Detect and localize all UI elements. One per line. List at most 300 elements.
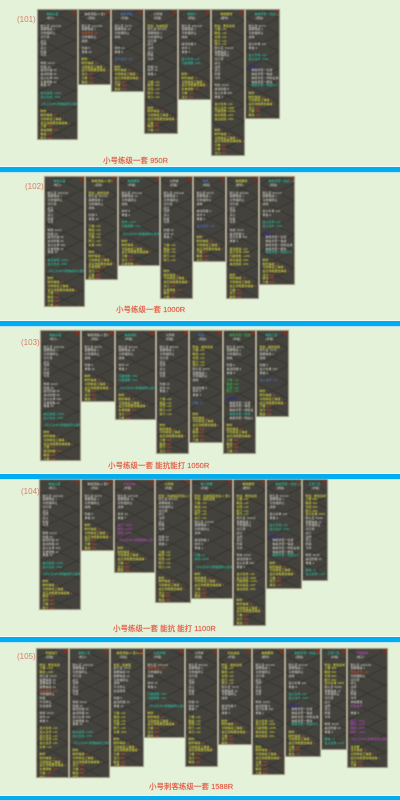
- panel: amulet: 力量 500: [324, 666, 336, 670]
- divider bar: [0, 166, 400, 173]
- panel: boots: 法力 200: [288, 748, 300, 752]
- panel: bracelet: 体力 +10: [222, 681, 233, 685]
- panel: gloves: 力量 200: [158, 594, 170, 598]
- panel: necklace: 最高洗练属性等级 9: [88, 262, 115, 266]
- panel: gloves: 力量 +10: [164, 243, 175, 247]
- panel: ring: 最高洗练属性等级等 9: [118, 557, 147, 561]
- panel: helmet: 精炼头盔: [54, 179, 66, 183]
- panel: ring: [111, 9, 144, 92]
- panel: armor: 重量 3: [236, 565, 245, 569]
- panel: amulet: (手镯): [312, 486, 320, 490]
- panel: mantle: 最高洗练属性等级等 9: [350, 756, 380, 760]
- panel: amulet: 敏捷 500: [324, 670, 336, 674]
- panel: armor: 物攻 10/10: [236, 553, 251, 557]
- panel: gloves: 大师戒: [170, 179, 179, 183]
- panel: armor: 敏捷 +10: [214, 31, 226, 35]
- label: 104: (104): [21, 487, 40, 496]
- panel: weapon: 负重 +10: [40, 745, 51, 749]
- panel: helmet: 耐久度 100/100: [44, 345, 64, 349]
- panel: armor: 闪避倍数 +10%: [230, 254, 250, 258]
- panel: armor: 可修理转让: [214, 53, 230, 57]
- panel: ring: 可修理转让: [114, 31, 130, 35]
- panel: gloves: (武器): [164, 486, 172, 490]
- panel: bracelet: [189, 330, 223, 443]
- panel: ring: 可转移给工等级 1: [118, 553, 141, 557]
- panel: amulet: 战士: [324, 700, 331, 704]
- panel: gloves: 法师: [164, 209, 170, 213]
- panel: bracelet: 闪避 +5: [192, 401, 203, 405]
- panel: armor: 精炼手套一套装: [230, 333, 251, 337]
- panel: armor: 法师: [214, 65, 221, 69]
- panel: helmet: 耐久度 100/100: [72, 663, 93, 667]
- panel: gloves: 刺客: [188, 689, 195, 693]
- panel: ring: 制作: [122, 239, 128, 243]
- panel: armor: 魔法抵抗 +10: [230, 247, 247, 251]
- panel: gloves: (武器): [166, 337, 174, 341]
- panel: gloves: 法师: [188, 681, 195, 685]
- panel: armor: 制作: [214, 128, 221, 132]
- panel: bracelet: 重量 3: [194, 546, 203, 550]
- panel: gloves: 体力 +10: [160, 412, 171, 416]
- panel: gloves: (武器): [154, 16, 162, 20]
- panel: bracelet: 耐久度 70/70: [222, 685, 239, 689]
- panel: gloves: 力量 +10: [188, 715, 200, 719]
- panel: boots: 敏捷 200: [248, 113, 260, 117]
- panel: ring: 通用: [148, 674, 154, 678]
- panel: helmet: 敏捷 200: [72, 771, 84, 775]
- panel: bracelet: (可以与NPC修理或转让使用): [195, 565, 233, 569]
- panel: armor: 最高洗练属性等级 9: [256, 756, 282, 760]
- panel: armor: (腰带): [242, 486, 250, 490]
- panel: boots: 可修理转让: [262, 198, 278, 202]
- panel: helmet: 可打捞: [48, 202, 57, 206]
- panel: armor: 附加 : 属性加成: [236, 494, 257, 498]
- panel: gloves: 体力 +10: [164, 258, 175, 262]
- panel: bracelet: 重量 3: [182, 50, 190, 54]
- panel: boots: 套装(5/5): [270, 535, 282, 539]
- panel: armor: 法力 200: [230, 291, 241, 295]
- panel: boots: [266, 479, 302, 589]
- section 105: [17, 648, 388, 791]
- panel: bracelet: 力量 200: [192, 438, 204, 442]
- panel: bracelet: 魔法防御 5: [182, 42, 196, 46]
- panel: boots: 魔法 200: [288, 752, 300, 756]
- panel: ring: 可转移给工等级 1: [148, 719, 171, 723]
- panel: helmet: 制作等级 10: [44, 434, 60, 438]
- panel: necklace: 力量 +10: [114, 722, 125, 726]
- panel: bracelet: 制作: [196, 235, 203, 239]
- panel: helmet: 最高洗练属性等级等 9: [72, 760, 102, 764]
- panel: boots: (项链): [295, 655, 303, 659]
- panel: boots: 精炼手套一到战士刃: [272, 553, 300, 557]
- panel: armor: 最大法术 +500: [256, 722, 275, 726]
- panel: helmet: 魔法防御 200: [44, 449, 61, 453]
- panel: helmet: [37, 9, 78, 140]
- panel: necklace: 防御 5: [114, 696, 122, 700]
- panel: gloves: 命中 10: [160, 386, 170, 390]
- panel: gloves: 防御 10: [160, 382, 170, 386]
- panel: armor: 最大负重 500: [230, 235, 247, 239]
- panel: helmet: 制作: [42, 579, 49, 583]
- panel: bracelet: (手镯): [200, 486, 208, 490]
- panel: weapon: 可修理转让: [40, 692, 55, 696]
- panel: boots: 通用: [262, 202, 269, 206]
- panel: bracelet: 法力 200: [196, 258, 208, 262]
- panel: weapon: 刺客短刃: [46, 651, 58, 655]
- panel: necklace: 可修理转让: [82, 35, 97, 39]
- panel: helmet: 制作等级 10: [72, 752, 89, 756]
- panel: bracelet: 魔法防御 3: [196, 209, 211, 213]
- panel: boots: 通用: [270, 505, 276, 509]
- panel: ring: 闪避倍数 +5%: [118, 378, 137, 382]
- panel: mantle: 耐久度 100/100: [350, 663, 371, 667]
- panel: ring: 负重倍数 200: [118, 408, 136, 412]
- panel: bracelet: 体力 +10: [194, 516, 206, 520]
- panel: armor: (手镯): [232, 337, 240, 341]
- panel: necklace: 力量 200: [84, 542, 96, 546]
- panel: helmet: 物攻 10/10: [42, 531, 57, 535]
- panel: bracelet: 通用: [182, 35, 188, 39]
- panel: armor: 可转移给工等级 1: [226, 430, 250, 434]
- panel: ring: 能打 +10%: [118, 523, 132, 527]
- panel: amulet: 耐久度 85/85: [324, 685, 342, 689]
- panel: weapon: 耐久度 10/10: [40, 674, 57, 678]
- section 104: [21, 478, 328, 633]
- panel: bracelet: (项链): [198, 337, 206, 341]
- panel: gloves: 刺客: [158, 523, 165, 527]
- panel: weapon: 需要等级 10: [40, 678, 56, 682]
- panel: helmet: 耐久度 100/100: [40, 24, 61, 28]
- panel: necklace: 通用: [88, 206, 95, 210]
- panel: weapon: 敏捷 +100: [40, 670, 53, 674]
- panel: boots: 精炼手套一属性: [272, 550, 294, 554]
- panel: boots: 精炼手套一属性: [266, 247, 287, 251]
- panel: gloves: [185, 648, 218, 767]
- panel: ring: 可修理转让: [148, 670, 163, 674]
- panel: boots: 套装(5/5): [248, 65, 261, 69]
- panel: necklace: 刷新属性 10: [82, 31, 98, 35]
- panel: mantle: 能打 +10%: [350, 719, 365, 723]
- panel: armor: 最高洗练属性等级 9: [230, 284, 256, 288]
- panel: armor: 可转移给工等级 1: [230, 280, 253, 284]
- panel: gloves: 智慧 +10: [188, 722, 200, 726]
- panel: helmet: 道士: [48, 213, 54, 217]
- panel: armor: (腰带): [236, 183, 244, 187]
- panel: armor: 法师: [236, 535, 243, 539]
- panel: amulet: 法师: [306, 535, 312, 539]
- panel: helmet: 需要等级 1: [72, 666, 87, 670]
- panel: helmet: 魔法防御 20: [42, 538, 59, 542]
- panel: boots: 法力 200: [248, 106, 260, 110]
- panel: necklace: 耐久度 60/70: [84, 345, 102, 349]
- panel: necklace: 重量 20: [82, 50, 92, 54]
- panel: boots: 可修理转让: [288, 670, 304, 674]
- panel: boots: 最大法术 +500: [270, 527, 289, 531]
- panel: ring: 制作: [118, 393, 125, 397]
- panel: weapon: 负担倍率: [40, 704, 52, 708]
- panel: helmet: 可修理转让: [40, 31, 56, 35]
- panel: ring: 制作等级 10: [114, 68, 131, 72]
- panel: boots: 力量 200: [288, 745, 300, 749]
- panel: armor: 弓手: [214, 76, 221, 80]
- panel: necklace: 需要等级 10: [114, 674, 130, 678]
- panel: bracelet: (项链): [188, 16, 196, 20]
- panel: ring: 闪避倍数 +5%: [148, 696, 166, 700]
- panel: mantle: 需要等级 1: [350, 666, 365, 670]
- panel: boots: 最大法术 +10: [260, 378, 277, 382]
- panel: armor: 最大负重 500: [256, 707, 273, 711]
- panel: weapon: 刷新属性 +10: [40, 689, 57, 693]
- panel: necklace: 附加 : 抗魔强: [114, 663, 131, 667]
- panel: necklace: 制作: [88, 250, 95, 254]
- panel: boots: 精炼手套一到战士刃: [292, 722, 319, 726]
- panel: mantle: (帽子): [356, 655, 364, 659]
- panel: boots: (手镯): [266, 337, 274, 341]
- panel: necklace: 负重 +5%: [114, 730, 126, 734]
- panel: armor: 制作等级 10: [214, 132, 231, 136]
- panel: amulet: 重量 3: [306, 561, 314, 565]
- panel: armor: 需要等级 1: [230, 194, 244, 198]
- panel: weapon: 物攻 10/10: [40, 711, 54, 715]
- panel: bracelet: 精炼M: [188, 12, 196, 16]
- panel: helmet: 重量 20: [72, 722, 83, 726]
- panel: necklace: 力量 +10: [88, 224, 100, 228]
- panel: amulet: 重量 3: [324, 730, 333, 734]
- panel: boots: 精炼手套一转职业用: [292, 715, 319, 719]
- panel: bracelet: 通用: [196, 202, 203, 206]
- panel: necklace: 制作: [84, 374, 91, 378]
- panel: boots: 精炼手套一等级: [252, 72, 273, 76]
- panel: bracelet: 可修理转让: [182, 31, 197, 35]
- panel: gloves: [160, 176, 193, 299]
- panel: gloves: 可修理转让: [158, 505, 174, 509]
- panel: necklace: 耐力 +10: [114, 726, 125, 730]
- panel: helmet: 最大负重 200: [48, 243, 65, 247]
- panel: amulet: 敏捷 500: [306, 501, 317, 505]
- panel: bracelet: 法力 200: [194, 591, 206, 595]
- panel: gloves: 命中 10: [188, 704, 199, 708]
- panel: helmet: 敏捷 200: [48, 295, 59, 299]
- section 103: [21, 330, 290, 470]
- panel: armor: 可修理转让: [230, 198, 245, 202]
- panel: boots: 重量 8: [288, 685, 297, 689]
- panel: amulet: 附加 : 属性加成: [324, 663, 345, 667]
- panel: boots: 最大生命 +10: [248, 53, 266, 57]
- panel: armor: 道士: [230, 213, 236, 217]
- panel: ring: 重量 6: [122, 213, 130, 217]
- panel: helmet: 移速倍数 200: [40, 128, 58, 132]
- panel: bracelet: 附加 : 抗魔强度增加+1 套3: [194, 494, 230, 498]
- panel: necklace: 敏捷 200: [84, 546, 96, 550]
- panel: helmet: 防御 20: [44, 386, 54, 390]
- panel: boots: 精炼手套一到战士刃: [276, 482, 302, 486]
- panel: gloves: 制作等级 10: [148, 109, 164, 113]
- panel: ring: 最大法术 +10: [114, 57, 132, 61]
- panel: weapon: 最大生命 +10: [40, 726, 57, 730]
- panel: necklace: 制作等级 10: [84, 527, 101, 531]
- panel: boots: 制作等级 10: [288, 734, 305, 738]
- panel: gloves: 道士: [158, 520, 165, 524]
- panel: helmet: 移动速度 +10%: [40, 91, 61, 95]
- panel: helmet: 最大生命 +500: [40, 95, 60, 99]
- panel: helmet: 防御 20: [48, 232, 58, 236]
- divider bar: [0, 320, 400, 327]
- panel: gloves: 可转移给工等级 1: [164, 276, 187, 280]
- panel: armor: 敏捷 200: [236, 621, 248, 625]
- panel: bracelet: 耐力 +10: [192, 360, 204, 364]
- panel: gloves: 可修理转让: [164, 198, 179, 202]
- panel: gloves: 大师戒: [154, 12, 163, 16]
- panel: bracelet: 闪避 +5: [194, 553, 205, 557]
- panel: boots: 精炼手套一等级: [266, 239, 287, 243]
- panel: necklace: 制作: [82, 57, 88, 61]
- panel: helmet: 移动速度 +10%: [48, 258, 68, 262]
- panel: necklace: 敏捷 +10: [114, 715, 125, 719]
- panel: helmet: 法师: [42, 512, 49, 516]
- panel: helmet: 力量 200: [40, 124, 52, 128]
- panel: necklace: 力量 +10: [114, 711, 125, 715]
- panel: armor: 最大生命 +500: [230, 250, 249, 254]
- panel: armor: 敏捷 +10: [236, 501, 248, 505]
- panel: helmet: 法师: [40, 42, 47, 46]
- panel: necklace: 需要等级 1: [88, 198, 103, 202]
- panel: mantle: 可打捞: [350, 678, 360, 682]
- panel: bracelet: 力量 +10: [222, 666, 233, 670]
- panel: amulet: (手镯): [330, 655, 338, 659]
- panel: necklace: 精炼项链+1 套3: [88, 482, 108, 486]
- panel: gloves: 需要等级 1: [188, 666, 203, 670]
- panel: armor: 闪避倍数 +10%: [214, 109, 235, 113]
- panel: helmet: 需要等级 1: [48, 194, 62, 198]
- panel: helmet: 最大负重 200: [40, 76, 58, 80]
- panel: necklace: 法力 200: [88, 269, 100, 273]
- panel: boots: 最大负重 100: [270, 512, 287, 516]
- panel: bracelet: 制作: [182, 72, 188, 76]
- panel: armor: 移动倍数 +5%: [214, 113, 233, 117]
- panel: bracelet: 力量 +10: [192, 348, 204, 352]
- panel: mantle: [347, 648, 388, 768]
- panel: boots: (项链): [255, 16, 263, 20]
- panel: helmet: 制作: [44, 430, 50, 434]
- panel: armor: 套装(5/5): [226, 397, 239, 401]
- panel: amulet: 耐力 500: [324, 678, 336, 682]
- panel: helmet: 弓手: [48, 220, 54, 224]
- panel: ring: 需要等级 10: [122, 194, 138, 198]
- panel: gloves: 制作: [164, 269, 170, 273]
- panel: necklace: 敏捷 +10: [88, 228, 100, 232]
- panel: boots: 精炼手套一到战士刃: [268, 179, 295, 183]
- panel: necklace: 法力 200: [82, 72, 93, 76]
- panel: necklace: 负担倍率: [114, 689, 126, 693]
- panel: ring: 耐久度 100/100: [148, 663, 168, 667]
- panel: mantle: 可修理转让: [350, 674, 366, 678]
- panel: necklace: [81, 479, 114, 551]
- panel: boots: 精炼手套一到战士刃: [266, 250, 293, 254]
- panel: armor: 最大法术 +500: [236, 576, 256, 580]
- panel: boots: 制作: [248, 91, 255, 95]
- panel: ring: 通用: [118, 356, 125, 360]
- panel: ring: 最高洗练属性等级 9: [114, 76, 141, 80]
- panel: armor: 可修理转让: [236, 523, 252, 527]
- panel: gloves: 敏捷 +10: [188, 719, 200, 723]
- panel: ring: 闪避倍数 +5%: [148, 692, 166, 696]
- panel: armor: 可打捞: [256, 674, 265, 678]
- panel: gloves: 最高洗练属性等级 9: [188, 748, 215, 752]
- panel: gloves: 道士: [188, 685, 195, 689]
- panel: gloves: 弓手: [148, 57, 154, 61]
- panel: boots: 精炼手套一转职业用: [272, 546, 300, 550]
- panel: ring: 命中 8: [122, 209, 130, 213]
- panel: gloves: 力量 200: [188, 752, 200, 756]
- panel: amulet: 附加 : 属性加成: [306, 494, 326, 498]
- panel: helmet: 魔法防御 20: [42, 542, 59, 546]
- panel: helmet: 可转移给工等级 1: [40, 117, 64, 121]
- panel: bracelet: 法力 200: [222, 737, 233, 741]
- panel: amulet: 王者三套: [308, 482, 321, 486]
- panel: helmet: (帽子): [54, 183, 62, 187]
- panel: boots: 重量 8: [270, 516, 278, 520]
- panel: armor: 防御 6: [226, 363, 235, 367]
- panel: bracelet: 耐久度 60/70: [196, 191, 214, 195]
- panel: armor: 弓手: [236, 546, 243, 550]
- panel: boots: 制作: [270, 561, 276, 565]
- panel: necklace: 精炼项链+1 套3: [84, 12, 105, 16]
- panel: boots: 附加 : 魔抗加成: [260, 345, 280, 349]
- panel: boots: 最大生命 +10: [270, 523, 287, 527]
- panel: necklace: 智慧 +10: [88, 232, 100, 236]
- panel: ring: 力量 200: [122, 254, 133, 258]
- panel: boots: [285, 648, 321, 757]
- panel: gloves: 刺客: [160, 371, 166, 375]
- panel: gloves: 制作等级 10: [160, 427, 176, 431]
- panel: gloves: 力量 +10: [160, 397, 171, 401]
- panel: gloves: 敏捷 +10: [148, 83, 159, 87]
- panel: amulet: 可修理转让: [306, 523, 321, 527]
- panel: armor: 物攻 10/10: [230, 228, 244, 232]
- panel: bracelet: 可修理转让: [192, 374, 208, 378]
- panel: bracelet: 可修理转让: [222, 692, 237, 696]
- panel: necklace: 法力 200: [84, 393, 96, 397]
- panel: gloves: 重量 1: [160, 389, 168, 393]
- panel: helmet: 重量 20: [40, 83, 51, 87]
- panel: helmet: 物攻 10/10: [72, 700, 87, 704]
- panel: necklace: 力量 +10: [88, 235, 100, 239]
- panel: bracelet: 敏捷 200: [196, 254, 208, 258]
- panel: boots: 最高洗练属性等级 9: [270, 572, 296, 576]
- panel: bracelet: 需要等级 10: [222, 689, 238, 693]
- panel: ring: 可修理转让: [118, 352, 134, 356]
- panel: gloves: 敏捷 200: [158, 598, 170, 602]
- panel: armor: 精炼腰带: [236, 179, 248, 183]
- panel: ring: 重量 8: [148, 685, 156, 689]
- panel: armor: 魔法抵抗 +5%: [214, 117, 233, 121]
- panel: weapon: 最大法术 +10: [40, 737, 57, 741]
- panel: ring: [118, 176, 160, 266]
- heading: 小号练级一套 能抗 能打 1100R: [113, 624, 216, 633]
- panel: gloves: 弓手: [188, 692, 195, 696]
- panel: gloves: 敏捷 +10: [160, 401, 171, 405]
- panel: gloves: 可转移给工等级 1: [188, 745, 212, 749]
- panel: armor: 刺客: [230, 217, 236, 221]
- panel: bracelet: 最大生命 +10: [182, 57, 199, 61]
- panel: gloves: 体力 +10: [188, 730, 200, 734]
- heading: 小号刺客练级一套 1588R: [149, 782, 233, 791]
- panel: bracelet: 敏捷 200: [222, 741, 233, 745]
- panel: helmet: 最大生命 +500: [72, 734, 92, 738]
- panel: boots: 法力 200: [270, 579, 281, 583]
- panel: amulet: 耐力 500: [306, 509, 317, 513]
- panel: bracelet: 通用: [222, 696, 228, 700]
